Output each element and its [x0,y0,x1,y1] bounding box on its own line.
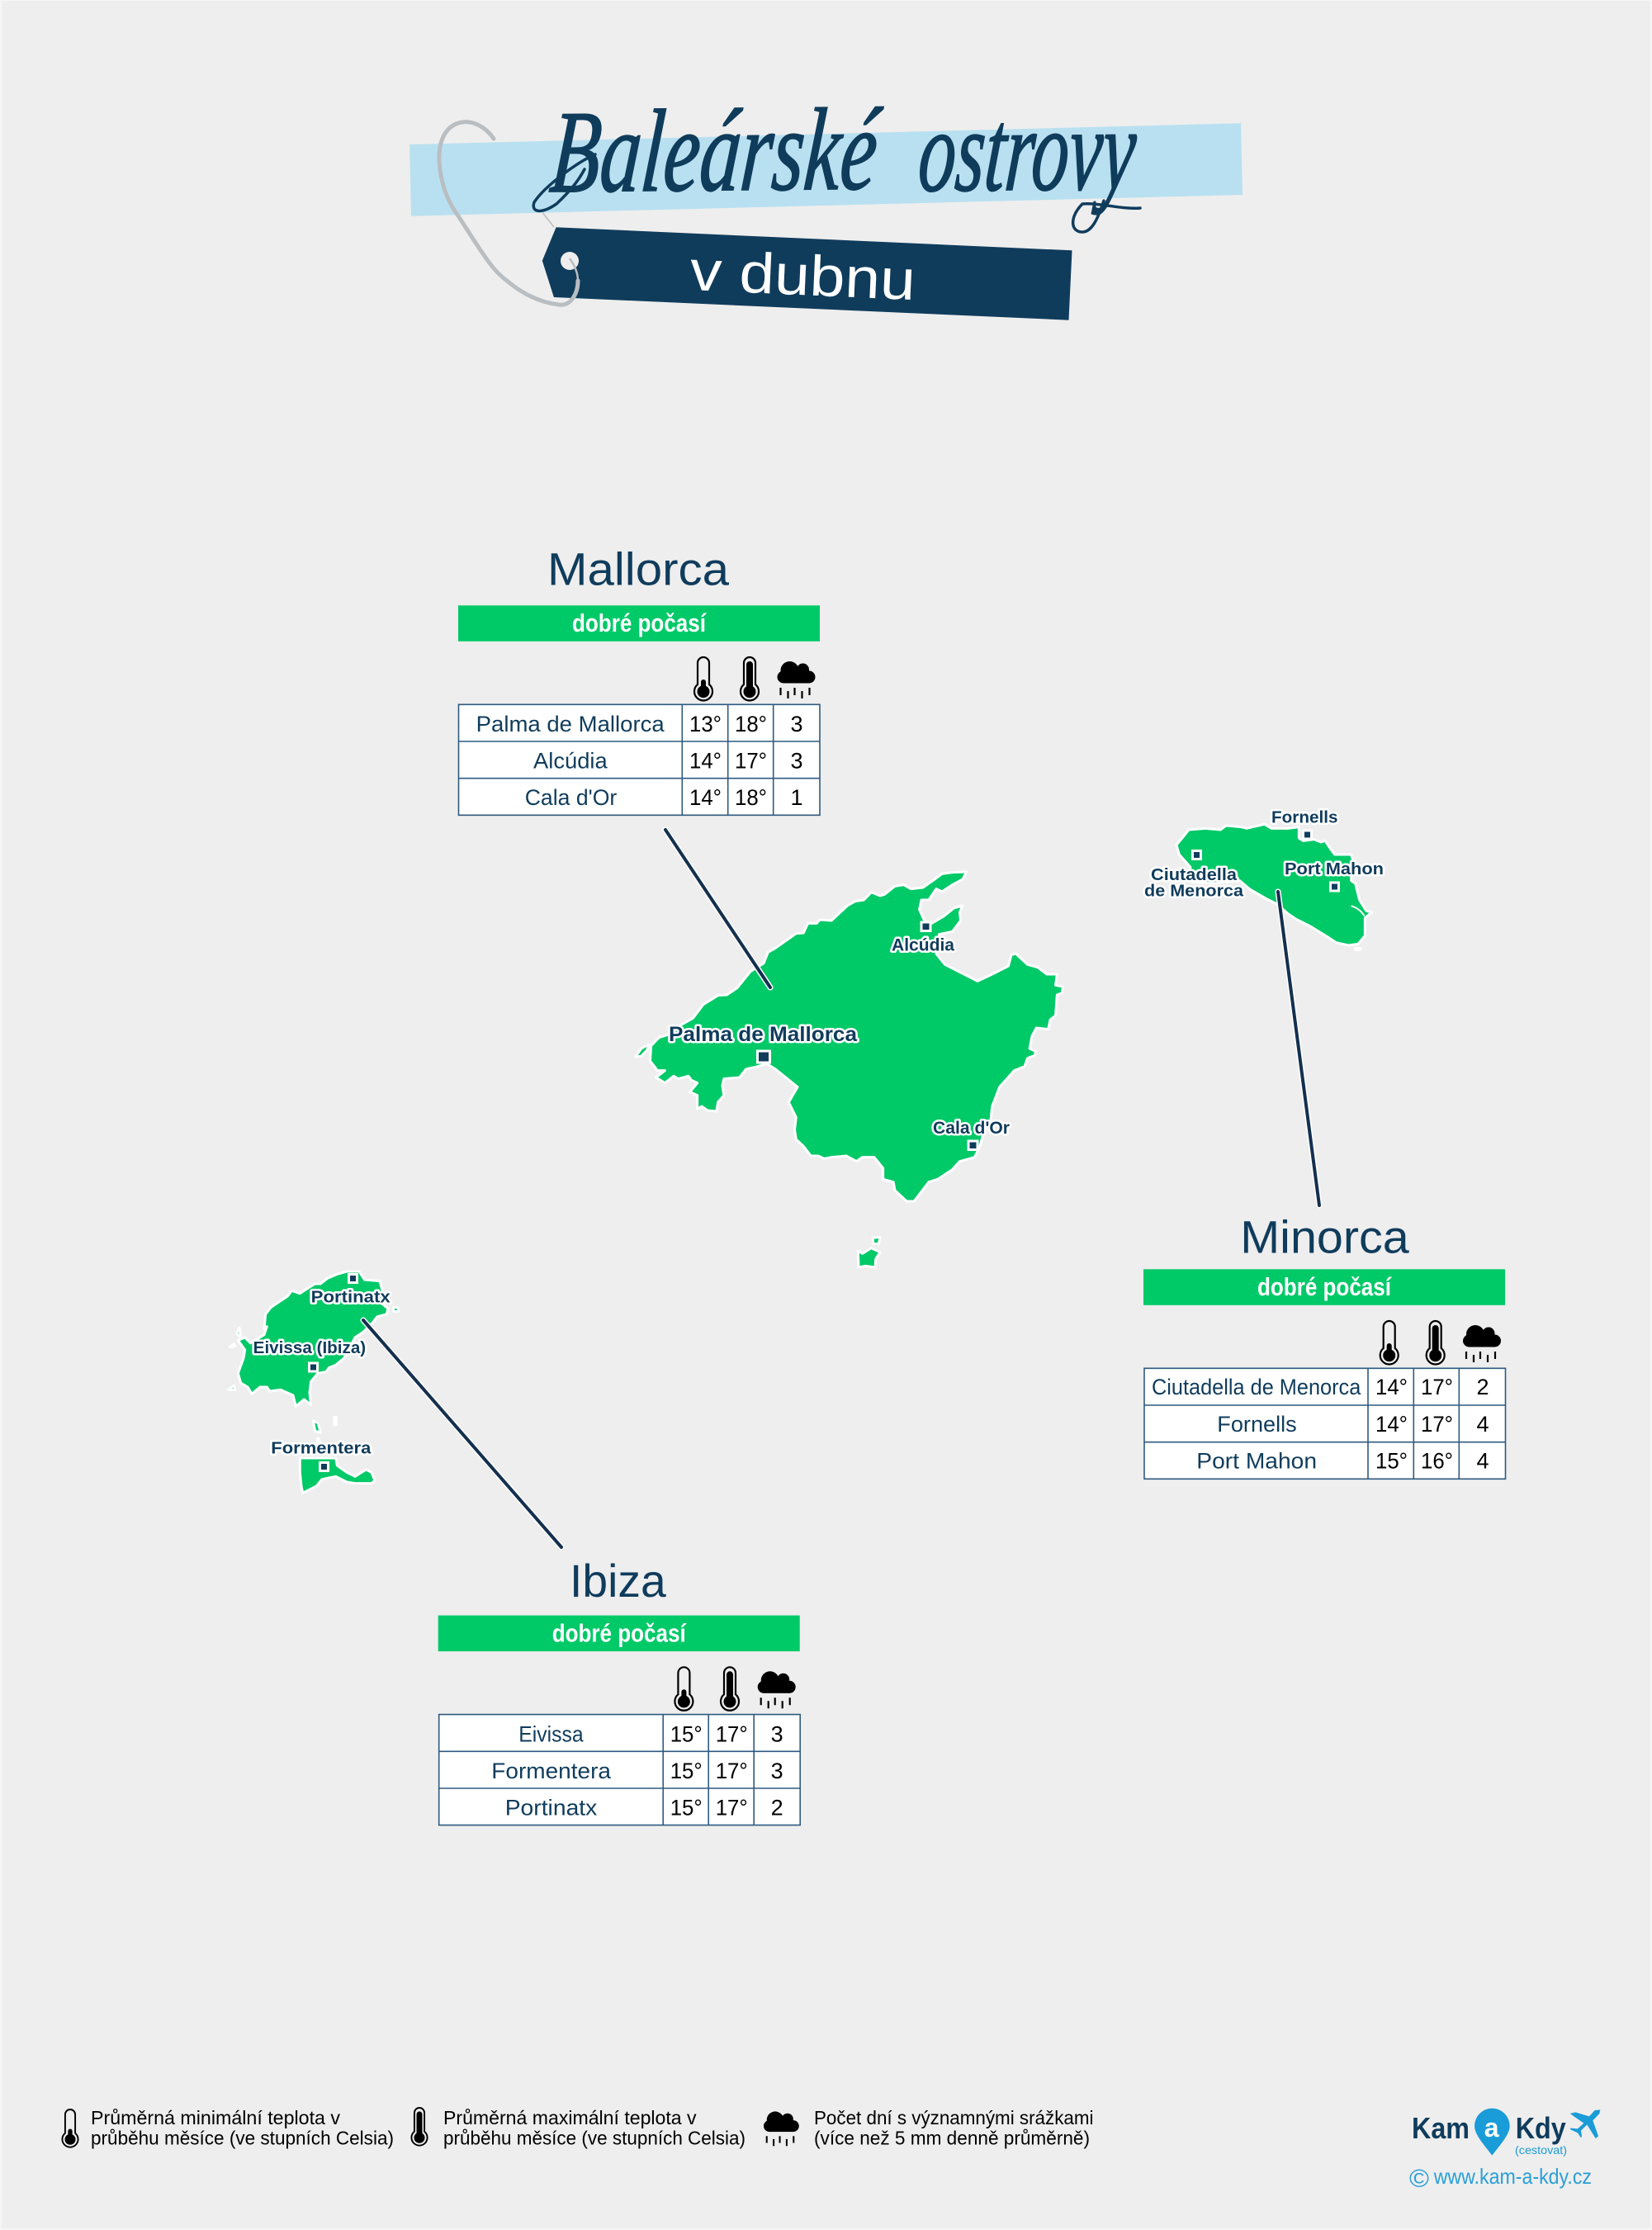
panel: Minorca [1143,1210,1506,1479]
logo word: Kam: Kam [1412,2111,1470,2145]
legend text: rain: (více než 5 mm denně průměrně) [814,2127,1090,2148]
status bar [1143,1269,1505,1305]
city: Eivissa (Ibiza): Eivissa (Ibiza) [253,1339,366,1357]
weather table: 18° [735,785,767,810]
status bar: dobré počasí [1257,1272,1392,1301]
weather table: Port Mahon [1196,1448,1317,1473]
legend text: maximum temperature [443,2107,746,2148]
legend text: minimum temperature [91,2107,394,2148]
tag hole [561,252,579,270]
title flourishes [533,154,1140,232]
title block [409,85,1243,320]
city: Palma de Mallorca [669,1023,858,1063]
weather table: Eivissa [518,1721,585,1746]
city: Formentera: Formentera [271,1440,372,1458]
subtitle tag [542,227,1072,320]
icon: map pin [1474,2109,1510,2156]
icon: minimum temperature [694,657,712,700]
icon: maximum temperature [1427,1321,1445,1364]
weather table: Alcúdia [533,749,608,774]
logo letter: a: a [1484,2113,1499,2142]
city: Portinatx [311,1275,391,1306]
leader line to Mallorca panel [665,830,770,987]
weather table: Cala d'Or [525,785,617,810]
logo tagline: (cestovat) [1515,2143,1567,2157]
weather table: 3 [771,1721,783,1746]
map: Mallorca [636,830,1063,1267]
city: Palma de Mallorca: Palma de Mallorca [669,1023,858,1046]
panel: Ibiza [438,1555,800,1825]
leader line to Minorca panel [1278,892,1319,1205]
weather table: 15° [670,1795,703,1820]
icon: rain [1463,1325,1501,1362]
weather table: Portinatx [505,1795,598,1820]
weather table: 17° [716,1759,748,1783]
status bar: dobré počasí [552,1618,687,1647]
island shapes [1176,824,1372,950]
legend [62,2107,1093,2148]
title text [547,85,1141,218]
title text: Baleárské [547,85,886,218]
city: Fornells [1271,809,1337,839]
city: Formentera [271,1440,372,1471]
city: Alcúdia: Alcúdia [892,936,954,954]
city: Alcúdia [892,922,954,954]
city: Ciutadella de Menorca: Ciutadella [1151,866,1238,884]
weather table: 18° [735,712,767,736]
map: Ibiza and Formentera [229,1271,561,1547]
heading: Minorca: Minorca [1240,1210,1410,1262]
logo: Kam a Kdy [1409,2109,1600,2193]
website: www.kam-a-kdy.cz [1433,2164,1592,2189]
icon: maximum temperature [721,1667,739,1711]
tag string [439,122,578,305]
weather table: Fornells [1217,1412,1297,1437]
legend icon: rain [764,2111,799,2146]
status bar: dobré počasí [572,608,707,637]
weather table: 17° [735,749,767,774]
heading: Ibiza: Ibiza [570,1555,667,1607]
city: Ciutadella de Menorca: de Menorca [1144,882,1244,900]
city: Cala d'Or: Cala d'Or [933,1119,1010,1138]
city: Portinatx: Portinatx [311,1288,391,1306]
string through hole [570,258,578,281]
icon: minimum temperature [1380,1321,1399,1364]
icon: airplane [1570,2109,1600,2138]
city: Cala d'Or [933,1119,1010,1149]
weather table: 17° [1421,1412,1453,1437]
weather table: 4 [1476,1412,1489,1437]
icon: rain [758,1671,796,1708]
subtitle text: v dubnu [689,239,916,312]
legend icon: maximum temperature [411,2108,428,2146]
weather table: 4 [1476,1448,1489,1473]
weather table: 14° [689,749,722,774]
weather table: 15° [670,1721,703,1746]
weather table: 3 [771,1759,783,1783]
thin string segment [543,213,554,227]
island shapes [229,1271,399,1493]
weather table: 13° [689,712,722,736]
weather table: 1 [790,785,803,810]
icon: minimum temperature [675,1667,693,1711]
city: Port Mahon: Port Mahon [1285,860,1384,878]
weather table: 3 [790,749,803,774]
weather table: 3 [790,712,803,736]
legend text: maximum temperature: Průměrná maximální teplota v [443,2107,697,2128]
weather table [459,704,820,815]
panel: Mallorca [458,542,820,815]
legend text: maximum temperature: průběhu měsíce (ve stupních Celsia) [443,2127,746,2148]
legend icon: minimum temperature [62,2109,78,2147]
status bar [438,1616,800,1651]
weather table [1144,1368,1506,1479]
weather table: 14° [689,785,722,810]
title text: ostrovy [915,85,1141,217]
weather table: 14° [1375,1412,1408,1437]
city: Fornells: Fornells [1271,809,1337,827]
legend text: minimum temperature: průběhu měsíce (ve stupních Celsia) [91,2127,394,2148]
island shapes [636,872,1063,1267]
leader line to Ibiza panel [363,1320,561,1547]
map: Minorca [1144,809,1384,1205]
weather table: 15° [670,1759,703,1783]
title band [409,123,1243,216]
legend text: rain: Počet dní s významnými srážkami [814,2107,1093,2128]
weather table: 15° [1375,1448,1408,1473]
icon: maximum temperature [741,657,759,700]
city: Port Mahon [1285,860,1384,891]
weather table: 17° [716,1721,748,1746]
copyright mark: © [1409,2164,1429,2193]
weather table: Palma de Mallorca [476,712,665,736]
weather table: 2 [771,1795,783,1820]
heading: Mallorca: Mallorca [547,542,730,594]
weather table: 16° [1421,1448,1453,1473]
city: Ciutadella de Menorca [1144,850,1244,900]
weather table: 2 [1476,1375,1489,1399]
icon: rain [778,661,816,698]
weather table: 17° [1421,1375,1453,1399]
weather table: 17° [716,1795,748,1820]
city: Eivissa (Ibiza) [253,1339,366,1371]
weather table: Formentera [491,1759,612,1783]
legend text: rain [814,2107,1093,2148]
status bar [458,605,820,642]
logo word: Kdy: Kdy [1516,2111,1566,2145]
weather table: 14° [1375,1375,1408,1399]
weather table: Ciutadella de Menorca [1152,1375,1361,1399]
weather table [439,1715,800,1825]
legend text: minimum temperature: Průměrná minimální teplota v [91,2107,341,2128]
